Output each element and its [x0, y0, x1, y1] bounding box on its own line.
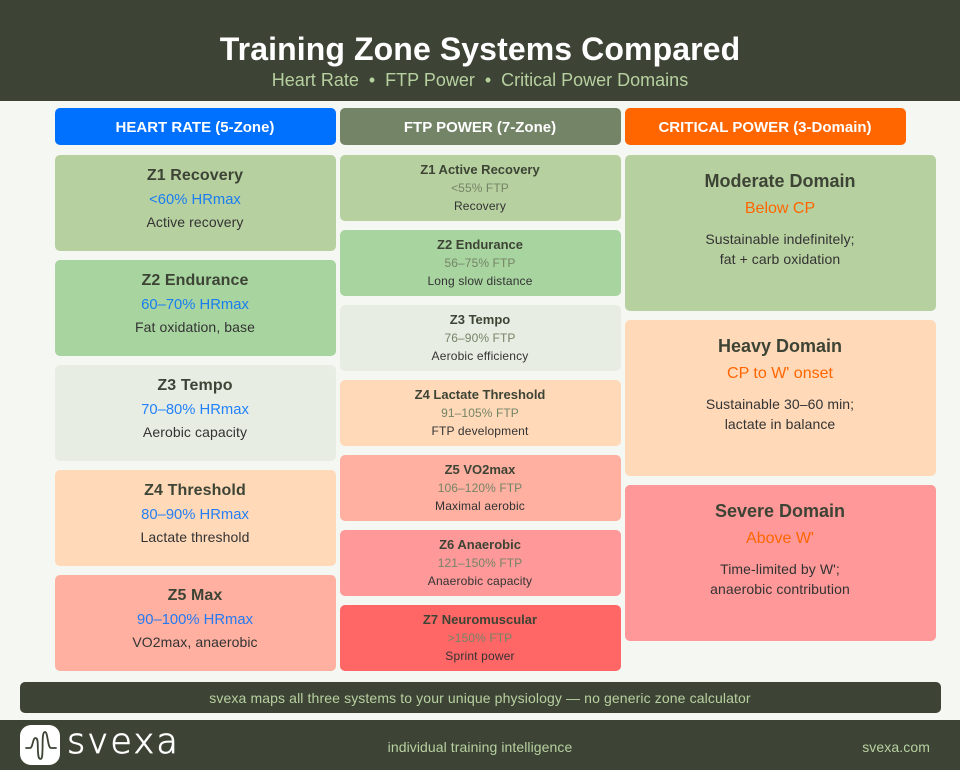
moderate domain card: Moderate Domain — [704, 171, 856, 191]
HR zone 5 card: 90–100% HRmax — [137, 612, 253, 628]
FTP zone 6 card — [340, 530, 621, 596]
title: Training Zone Systems Compared — [220, 31, 740, 67]
FTP zone 6 card: Z6 Anaerobic — [439, 537, 521, 552]
FTP zone 4 card: FTP development — [431, 424, 529, 438]
HR zone 4 card: 80–90% HRmax — [141, 507, 249, 523]
moderate domain card: fat + carb oxidation — [720, 251, 840, 267]
FTP zone 3 card: 76–90% FTP — [444, 331, 516, 345]
FTP zone 5 card: 106–120% FTP — [438, 481, 522, 495]
HR zone 4 card — [55, 470, 336, 566]
column header: heart rate — [55, 108, 336, 145]
HR zone 2 card: 60–70% HRmax — [141, 297, 249, 313]
tagline: individual training intelligence — [388, 739, 572, 755]
FTP zone 1 card — [340, 155, 621, 221]
HR zone 3 card: 70–80% HRmax — [141, 402, 249, 418]
column header: critical power — [625, 108, 906, 145]
severe domain card: Above W' — [746, 530, 814, 547]
FTP zone 3 card: Z3 Tempo — [450, 312, 510, 327]
FTP zone 1 card: Recovery — [454, 199, 506, 213]
website: svexa.com — [862, 739, 930, 755]
callout banner: svexa maps all three systems to your unique physiology — no generic zone calculator — [209, 690, 751, 706]
HR zone 5 card: VO2max, anaerobic — [132, 634, 258, 650]
FTP zone 3 card: Aerobic efficiency — [432, 349, 528, 363]
HR zone 3 card — [55, 365, 336, 461]
HR zone 4 card: Z4 Threshold — [144, 482, 246, 499]
HR zone 3 card: Aerobic capacity — [143, 424, 247, 440]
HR zone 2 card: Z2 Endurance — [141, 272, 248, 289]
FTP zone 5 card: Z5 VO2max — [445, 462, 515, 477]
FTP zone 2 card — [340, 230, 621, 296]
HR zone 1 card: Z1 Recovery — [147, 167, 243, 184]
subtitle: Heart Rate • FTP Power • Critical Power Domains — [272, 70, 688, 90]
moderate domain card: Below CP — [745, 200, 815, 217]
panel: heart rate zones — [55, 155, 336, 671]
FTP zone 2 card: Long slow distance — [427, 274, 533, 288]
heavy domain card: lactate in balance — [725, 416, 835, 432]
heavy domain card: CP to W' onset — [727, 365, 833, 382]
FTP zone 7 card: >150% FTP — [448, 631, 512, 645]
column header: FTP power — [340, 108, 621, 145]
HR zone 1 card — [55, 155, 336, 251]
FTP zone 7 card: Z7 Neuromuscular — [423, 612, 537, 627]
moderate domain card — [625, 155, 936, 311]
FTP zone 1 card: <55% FTP — [451, 181, 509, 195]
FTP zone 6 card: 121–150% FTP — [438, 556, 522, 570]
column header: FTP power: FTP POWER (7-Zone) — [404, 119, 556, 136]
FTP zone 7 card: Sprint power — [445, 649, 515, 663]
FTP zone 4 card — [340, 380, 621, 446]
FTP zone 2 card: 56–75% FTP — [444, 256, 516, 270]
HR zone 2 card: Fat oxidation, base — [135, 319, 255, 335]
FTP zone 6 card: Anaerobic capacity — [428, 574, 532, 588]
callout banner — [20, 682, 941, 713]
moderate domain card: Sustainable indefinitely; — [705, 231, 855, 247]
severe domain card: Severe Domain — [715, 501, 845, 521]
severe domain card: anaerobic contribution — [710, 581, 850, 597]
FTP zone 4 card: 91–105% FTP — [441, 406, 519, 420]
column header: critical power: CRITICAL POWER (3-Domain) — [658, 119, 872, 136]
FTP zone 1 card: Z1 Active Recovery — [420, 162, 540, 177]
FTP zone 5 card: Maximal aerobic — [435, 499, 525, 513]
panel: FTP power zones — [340, 155, 621, 671]
HR zone 5 card: Z5 Max — [168, 587, 222, 604]
FTP zone 5 card — [340, 455, 621, 521]
HR zone 4 card: Lactate threshold — [141, 529, 249, 545]
header band — [0, 0, 960, 101]
severe domain card — [625, 485, 936, 641]
footer band — [0, 720, 960, 770]
HR zone 3 card: Z3 Tempo — [157, 377, 233, 394]
heavy domain card: Sustainable 30–60 min; — [706, 396, 854, 412]
HR zone 2 card — [55, 260, 336, 356]
heavy domain card — [625, 320, 936, 476]
FTP zone 2 card: Z2 Endurance — [437, 237, 523, 252]
FTP zone 7 card — [340, 605, 621, 671]
heavy domain card: Heavy Domain — [718, 336, 842, 356]
FTP zone 4 card: Z4 Lactate Threshold — [415, 387, 545, 402]
svexa wordmark: svexa — [67, 722, 180, 762]
column header: heart rate: HEART RATE (5-Zone) — [116, 119, 274, 136]
HR zone 5 card — [55, 575, 336, 671]
HR zone 1 card: Active recovery — [146, 214, 244, 230]
HR zone 1 card: <60% HRmax — [149, 192, 241, 208]
FTP zone 3 card — [340, 305, 621, 371]
severe domain card: Time-limited by W'; — [720, 561, 840, 577]
icon: svexa logo mark — [20, 725, 60, 765]
